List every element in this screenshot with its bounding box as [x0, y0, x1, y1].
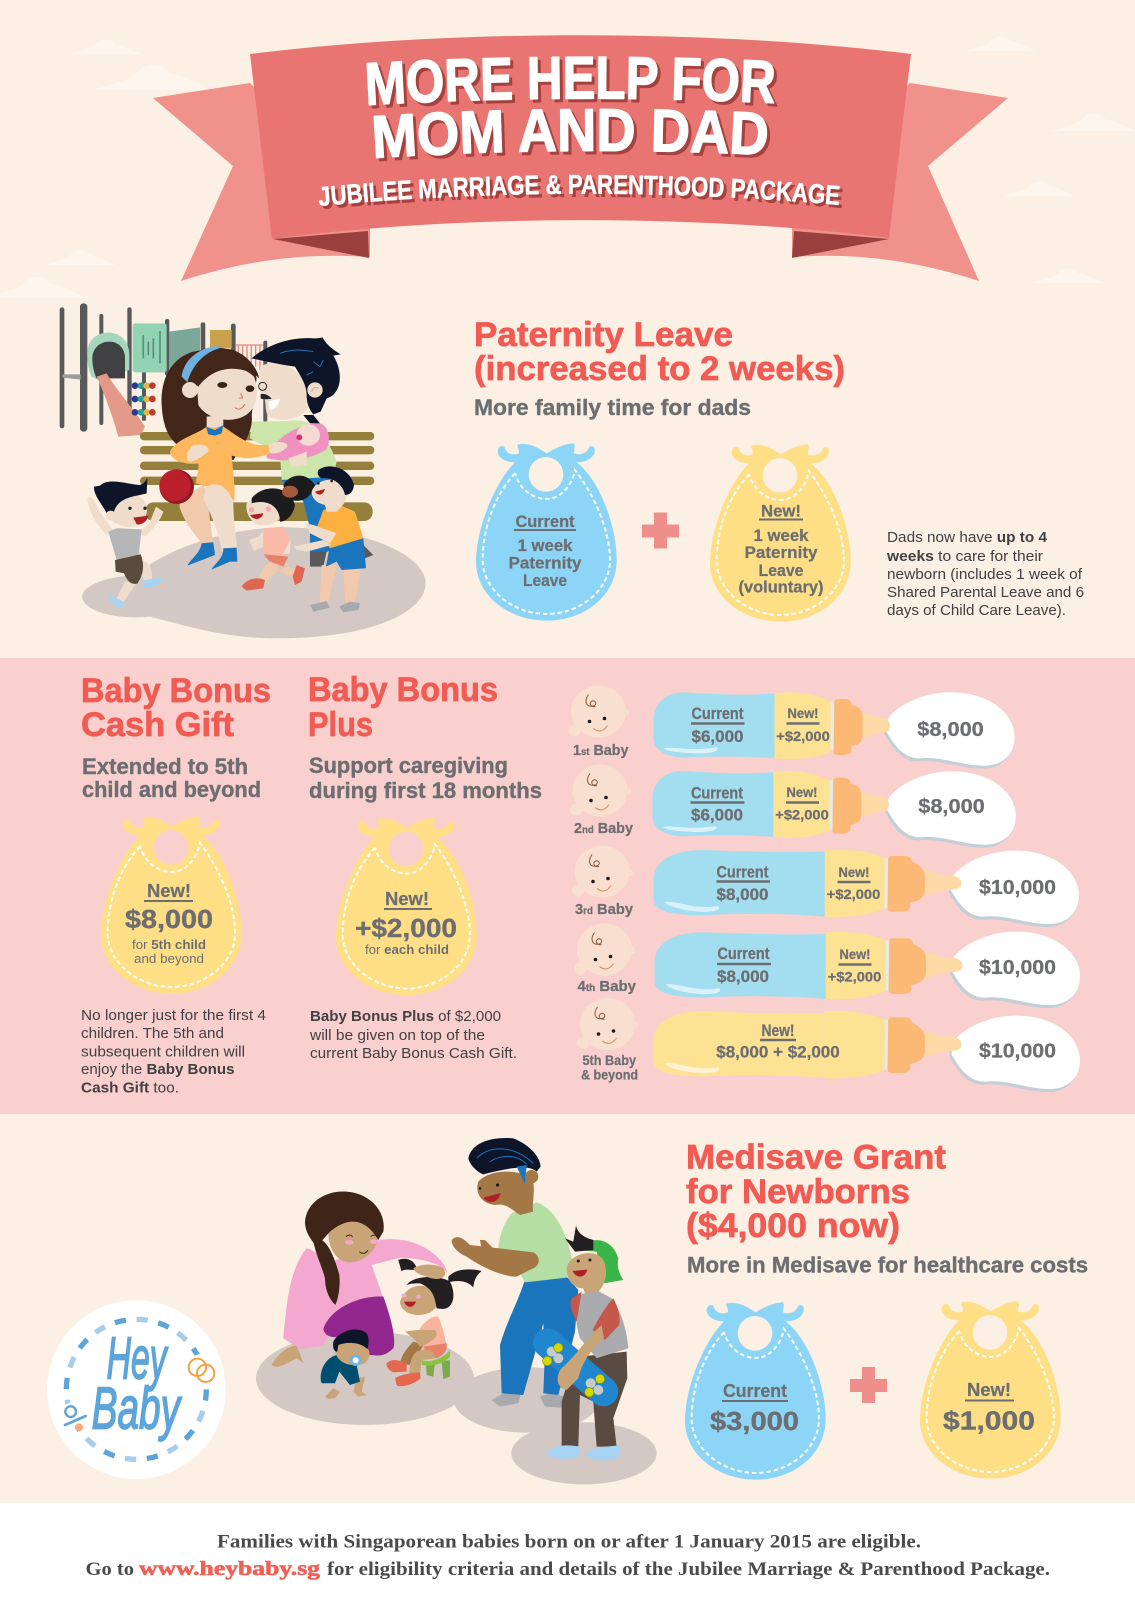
- text: cash gift: children. The 5th and: [81, 1026, 224, 1042]
- text: cash gift: [81, 1008, 266, 1096]
- text: baby bonus plus: will be given on top of the: [309, 1028, 485, 1044]
- bib: current paternity: Current: [516, 513, 575, 531]
- baby face: [578, 998, 638, 1050]
- title: MOM AND DAD: [374, 108, 770, 162]
- girl on stool: [387, 1259, 482, 1386]
- row: 1st baby: Current: [692, 705, 744, 723]
- bib: baby bonus plus: +$2,000: [355, 913, 457, 943]
- playground: [60, 303, 267, 437]
- text: cash gift: enjoy the Baby Bonus: [81, 1062, 234, 1078]
- bottle: [654, 850, 962, 917]
- subheading: cash gift: Extended to 5th: [82, 754, 248, 779]
- illustration: family at play: [256, 1138, 657, 1484]
- logo: hey baby: Hey: [107, 1324, 169, 1391]
- note: paternity: weeks to care for their: [886, 549, 1043, 565]
- heading: paternity leave: (increased to 2 weeks): [474, 350, 845, 388]
- milk drop: [950, 932, 1080, 1008]
- bib: new paternity: Paternity: [744, 544, 818, 562]
- boy left: [87, 478, 163, 608]
- row: 1st baby: $8,000: [917, 719, 984, 741]
- bib: baby bonus plus: for each child: [365, 942, 449, 957]
- row: 2nd baby: 2nd Baby: [574, 820, 634, 837]
- heading: paternity leave: [474, 316, 845, 388]
- heading: baby bonus plus: Baby Bonus: [308, 671, 498, 709]
- bib: cash gift: and beyond: [134, 951, 204, 966]
- row: 5th baby and beyond: $8,000 + $2,000: [716, 1044, 840, 1062]
- footer: Go to: [86, 1559, 134, 1580]
- plus sign: [642, 512, 679, 548]
- bib: current paternity: Leave: [523, 572, 567, 590]
- row: 2nd baby: Current: [691, 784, 743, 802]
- text: cash gift: No longer just for the first 4: [81, 1008, 266, 1024]
- bib: cash gift: for 5th child: [132, 937, 206, 952]
- boy right: [293, 466, 366, 612]
- row: 3rd baby: 3rd Baby: [575, 901, 634, 918]
- bib: new medisave: New!: [967, 1380, 1011, 1400]
- row: 3rd baby: Current: [716, 864, 769, 882]
- subheading: cash gift: [82, 754, 261, 802]
- title: MORE HELP FOR: [366, 56, 778, 108]
- title: [318, 56, 843, 209]
- ribbon tail left: [153, 83, 370, 281]
- heading: baby bonus plus: Plus: [308, 706, 373, 744]
- note: paternity: Shared Parental Leave and 6: [887, 585, 1084, 601]
- row: 5th baby and beyond: 5th Baby: [582, 1053, 636, 1068]
- bib: new paternity: New!: [761, 502, 801, 520]
- heading: cash gift: Cash Gift: [81, 706, 234, 744]
- panel: baby bonus: [0, 658, 1135, 1114]
- heading: medisave grant: ($4,000 now): [686, 1207, 900, 1245]
- milk drop: [950, 1016, 1080, 1092]
- bib: current paternity: Paternity: [508, 554, 582, 572]
- row: 2nd baby: [570, 764, 1016, 848]
- row: 2nd baby: +$2,000: [775, 806, 829, 822]
- milk drop: [949, 851, 1079, 927]
- clouds: [0, 36, 1135, 297]
- bib: new paternity: [710, 444, 851, 622]
- father: [452, 1138, 578, 1408]
- bib: baby bonus plus: [336, 818, 477, 995]
- girl: [242, 476, 315, 591]
- ribbon fold right: [792, 231, 889, 258]
- row: 5th baby and beyond: & beyond: [581, 1068, 638, 1082]
- row: 2nd baby: New!: [786, 784, 818, 800]
- footer: [0, 1503, 1135, 1600]
- bib: current medisave: $3,000: [710, 1406, 799, 1436]
- text: baby bonus plus: current Baby Bonus Cash Gift.: [310, 1046, 517, 1062]
- bib: current medisave: [685, 1302, 826, 1480]
- row: 1st baby: $6,000: [692, 728, 744, 746]
- ground shadow: [82, 527, 426, 638]
- bib: new medisave: [920, 1301, 1061, 1479]
- ribbon fold left: [273, 231, 369, 258]
- bib: new paternity: 1 week: [754, 527, 809, 545]
- milk drop: [886, 771, 1016, 848]
- baby face: [570, 764, 631, 816]
- row: 3rd baby: [572, 846, 1079, 927]
- row: 5th baby and beyond: New!: [762, 1022, 794, 1040]
- text: cash gift: subsequent children will: [81, 1044, 245, 1060]
- note: paternity: Dads now have up to 4: [887, 530, 1047, 546]
- heading: paternity leave: Paternity Leave: [474, 316, 733, 354]
- illustration: family on bench: [60, 303, 426, 638]
- subheading: baby bonus plus: Support caregiving: [309, 753, 508, 778]
- ribbon tail right: [792, 83, 1008, 281]
- bib: cash gift: [101, 816, 242, 994]
- row: 4th baby: Current: [718, 945, 770, 963]
- text: cash gift: Cash Gift too.: [81, 1080, 179, 1096]
- note: paternity: days of Child Care Leave).: [887, 603, 1066, 619]
- bib: current medisave: Current: [723, 1381, 787, 1401]
- baby face: [574, 924, 636, 976]
- row: 4th baby: 4th Baby: [578, 978, 637, 995]
- row: 5th baby and beyond: $10,000: [979, 1040, 1056, 1062]
- row: 3rd baby: $8,000: [716, 886, 768, 904]
- baby face: [572, 846, 633, 898]
- bench: [140, 432, 374, 521]
- row: 3rd baby: New!: [838, 864, 870, 880]
- banner ribbon: [153, 35, 1008, 281]
- text: baby bonus plus: [309, 1009, 517, 1062]
- bib: current paternity: [476, 443, 617, 621]
- boy with skateboard: [527, 1226, 628, 1461]
- heading: medisave grant: Medisave Grant: [686, 1138, 946, 1176]
- row: 2nd baby: $6,000: [691, 806, 743, 824]
- mother: [159, 346, 287, 570]
- subtitle: JUBILEE MARRIAGE & PARENTHOOD PACKAGE: [318, 174, 843, 209]
- ground shadows: [256, 1332, 657, 1484]
- heading: medisave grant: for Newborns: [686, 1173, 910, 1211]
- row: 4th baby: +$2,000: [828, 968, 881, 984]
- row: 1st baby: [568, 686, 1015, 769]
- bib: new paternity: (voluntary): [738, 578, 824, 596]
- row: 1st baby: 1st Baby: [573, 742, 629, 759]
- row: 3rd baby: $10,000: [979, 877, 1056, 899]
- footer: for eligibility criteria and details of the Jubilee Marriage & Parenthood Package.: [327, 1559, 1050, 1580]
- bib: baby bonus plus: New!: [385, 889, 429, 909]
- toddler: [321, 1330, 369, 1399]
- footer: Families with Singaporean babies born on or after 1 January 2015 are eligible.: [217, 1532, 921, 1552]
- bib: current paternity: 1 week: [518, 537, 573, 555]
- logo: hey baby: [47, 1300, 226, 1479]
- bottle: [654, 692, 890, 759]
- subheading: paternity: More family time for dads: [474, 395, 751, 420]
- row: 4th baby: [574, 924, 1080, 1008]
- logo: hey baby: Baby: [92, 1374, 182, 1441]
- bib: cash gift: New!: [147, 881, 191, 901]
- row: 1st baby: +$2,000: [776, 728, 830, 744]
- ribbon main: [250, 35, 911, 239]
- row: 2nd baby: $8,000: [918, 796, 985, 818]
- bottle: [654, 1011, 962, 1078]
- row: 4th baby: New!: [840, 946, 870, 962]
- milk drop: [885, 692, 1015, 769]
- plus sign: [850, 1367, 887, 1403]
- subheading: baby bonus plus: [309, 753, 542, 803]
- father: [250, 337, 373, 567]
- bottle: [652, 771, 889, 838]
- heading: cash gift: [81, 672, 271, 744]
- subheading: baby bonus plus: during first 18 months: [309, 778, 542, 803]
- subheading: cash gift: child and beyond: [82, 777, 261, 802]
- baby face: [568, 686, 630, 738]
- bib: new medisave: $1,000: [943, 1406, 1035, 1436]
- heading: baby bonus plus: [308, 671, 498, 744]
- note: paternity: [886, 530, 1084, 619]
- footer: www.heybaby.sg: [139, 1558, 320, 1580]
- bottle: [655, 932, 963, 999]
- note: paternity: newborn (includes 1 week of: [887, 567, 1083, 583]
- bib: cash gift: $8,000: [125, 904, 213, 934]
- subheading: medisave: More in Medisave for healthcare costs: [687, 1252, 1088, 1278]
- mother: [272, 1192, 447, 1367]
- bib: new paternity: Leave: [758, 562, 804, 580]
- row: 4th baby: $8,000: [717, 968, 769, 986]
- heading: cash gift: Baby Bonus: [81, 672, 271, 710]
- row: 4th baby: $10,000: [979, 957, 1056, 979]
- heading: medisave grant: [686, 1138, 946, 1245]
- text: baby bonus plus: Baby Bonus Plus of $2,000: [310, 1009, 501, 1025]
- row: 5th baby and beyond: [578, 998, 1080, 1092]
- row: 1st baby: New!: [788, 705, 818, 721]
- row: 3rd baby: +$2,000: [827, 886, 880, 902]
